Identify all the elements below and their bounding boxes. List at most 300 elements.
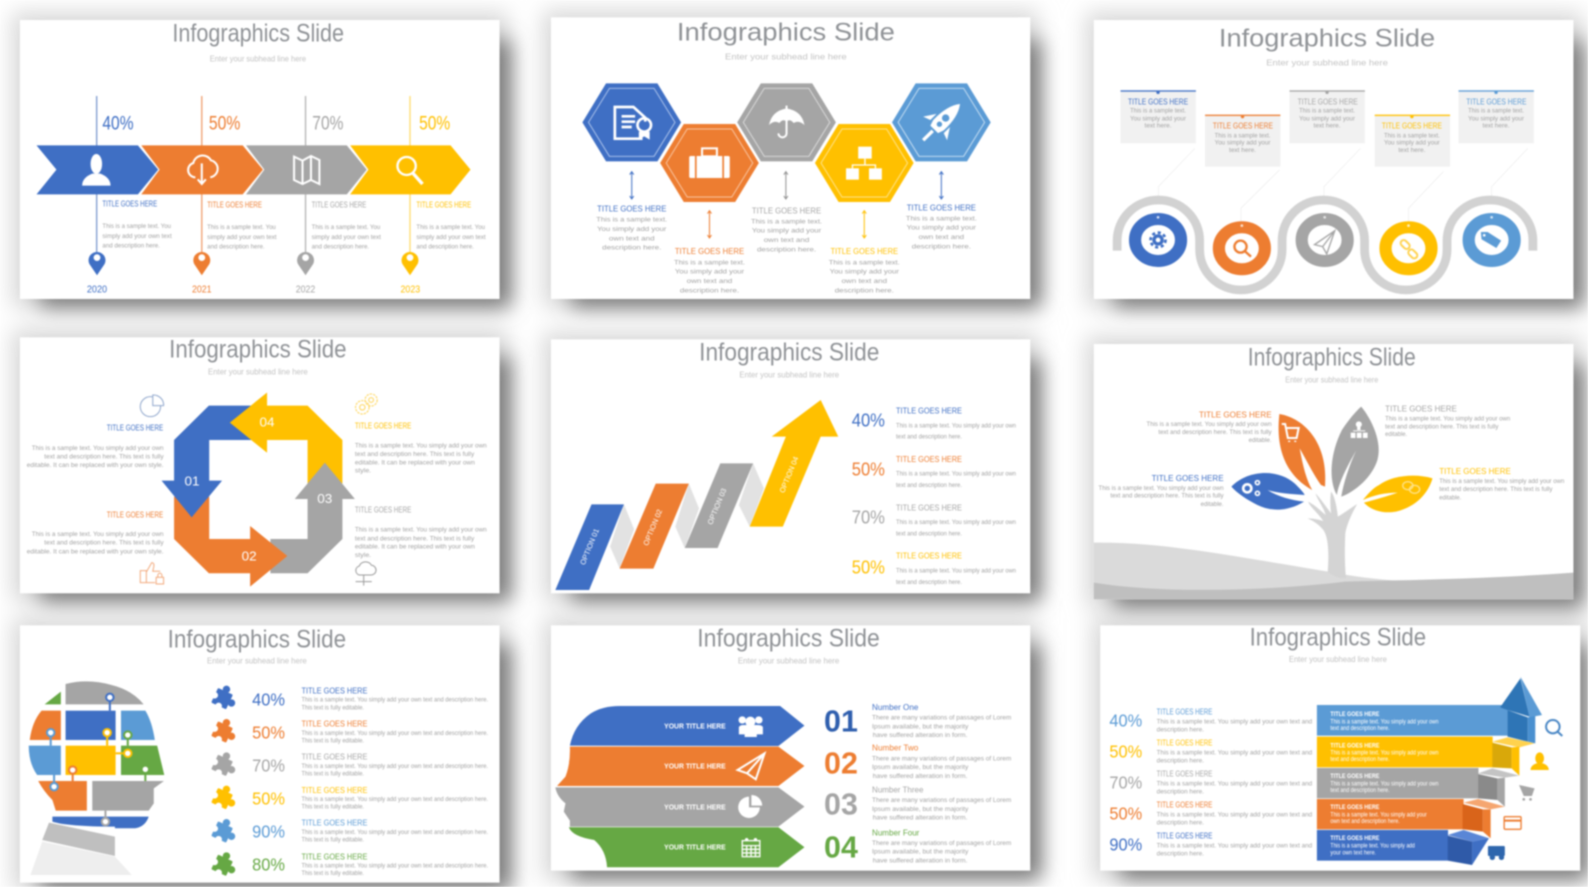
text block: yellow: This is a sample text. bbox=[829, 259, 900, 266]
card 3: You simply add your bbox=[1299, 115, 1356, 122]
card 4 bbox=[1375, 115, 1450, 167]
cycle numbers: 01 bbox=[184, 474, 199, 489]
row: 40%: This is a sample text. You simply add your own bbox=[896, 422, 1016, 429]
row: 50% yellow: text and description here. bbox=[896, 579, 962, 586]
title: Infographics Slide bbox=[169, 335, 347, 363]
text block: orange bbox=[674, 247, 745, 294]
text block: 2020: TITLE GOES HERE bbox=[102, 200, 158, 209]
row: 70% bbox=[852, 503, 1016, 537]
text block: orange bbox=[1147, 410, 1272, 444]
subhead: Enter your subhead line here bbox=[1285, 375, 1379, 384]
percentages: 50% bbox=[419, 112, 450, 134]
card 2: text here. bbox=[1229, 147, 1256, 154]
band 1 blue: YOUR TITLE HERE bbox=[664, 721, 726, 730]
text block: orange: TITLE GOES HERE bbox=[107, 510, 164, 519]
row: 50% orange: text and description here. bbox=[896, 482, 962, 489]
big numbers bbox=[824, 704, 858, 864]
text block: yellow bbox=[829, 247, 900, 294]
card 5 bbox=[1459, 90, 1534, 143]
text block: blue bbox=[1099, 474, 1224, 508]
leaf: yellow with chat bbox=[1363, 476, 1433, 512]
hexagon: orange briefcase bbox=[660, 124, 759, 202]
row: 90% light blue bbox=[207, 815, 488, 848]
row: 40% blue: 40% bbox=[252, 689, 285, 709]
years bbox=[87, 285, 420, 296]
title: Infographics Slide bbox=[699, 339, 879, 367]
title: Infographics Slide bbox=[172, 20, 344, 48]
text block: yellow: text and description here. This text is fully bbox=[1439, 486, 1553, 493]
row: 40% blue bbox=[207, 681, 488, 715]
text block: yellow: editable. It can be replaced with your own bbox=[355, 459, 475, 466]
bar labels: This is a sample text. You simply add your own bbox=[1330, 749, 1439, 756]
row: 50% orange bbox=[207, 715, 488, 748]
row: 40% bbox=[852, 407, 1016, 441]
text block: 2022: This is a sample text. You bbox=[312, 224, 380, 231]
row: 50% orange: 50% bbox=[852, 458, 885, 479]
card 5: TITLE GOES HERE bbox=[1466, 97, 1527, 106]
ring: blue gear bbox=[1135, 216, 1181, 261]
card 3: text here. bbox=[1314, 123, 1341, 130]
text block: number three: have suffered alteration in form. bbox=[873, 815, 967, 822]
slide background bbox=[551, 625, 1030, 871]
arrow head: 04 yellow bbox=[230, 393, 267, 453]
text block: yellow: You simply add your bbox=[830, 269, 900, 276]
text block: number four: Number Four bbox=[872, 828, 920, 837]
row: 50% yellow: 50% bbox=[1109, 742, 1142, 762]
text block: orange: This is a sample text. bbox=[674, 259, 745, 266]
timeline vertical lines bbox=[97, 96, 410, 253]
panel: winding path slide bbox=[1094, 20, 1573, 299]
row: 50% orange: This is a sample text. You simply add your own text and bbox=[1157, 811, 1312, 818]
row: 40% blue: This text is fully editable. bbox=[301, 704, 364, 711]
text block: gray bbox=[1385, 405, 1510, 438]
band 3 gray bbox=[555, 787, 804, 827]
row: 70% gray: This is a sample text. You simply add your own text and description here. bbox=[301, 763, 488, 770]
ribbon: option 02: OPTION 02 bbox=[641, 508, 664, 547]
icon: thumbs up outline bbox=[140, 563, 164, 584]
bar labels: This is a sample text. You simply add your own bbox=[1330, 718, 1439, 725]
band 2 orange: YOUR TITLE HERE bbox=[664, 762, 726, 771]
text block: number one bbox=[872, 703, 1012, 739]
row: 90% light blue: This text is fully editable. bbox=[301, 837, 364, 844]
slide background bbox=[1100, 625, 1580, 871]
icon: map bbox=[294, 156, 319, 184]
text block: gray: This is a sample text. You simply add your own bbox=[1385, 416, 1510, 423]
row: 50% yellow: TITLE GOES HERE bbox=[896, 552, 963, 561]
subhead: Enter your subhead line here bbox=[725, 52, 847, 61]
text block: number three: Number Three bbox=[872, 786, 924, 795]
card 1: This is a sample text. bbox=[1130, 108, 1186, 115]
text block: orange: TITLE GOES HERE bbox=[675, 247, 745, 256]
text block: blue: This is a sample text. bbox=[596, 217, 667, 224]
text block: number one: Ipsum available, but the majority bbox=[872, 723, 969, 730]
card 3: TITLE GOES HERE bbox=[1298, 97, 1358, 106]
row: 40% blue: TITLE GOES HERE bbox=[301, 686, 368, 695]
panel: cycle arrows slide bbox=[20, 335, 500, 593]
slide background bbox=[551, 17, 1030, 299]
percentages: 40% bbox=[102, 112, 134, 134]
icon: network cloud outline bbox=[356, 562, 376, 586]
bar labels: TITLE GOES HERE bbox=[1330, 773, 1380, 780]
location pins bbox=[89, 252, 418, 275]
text block: light blue: You simply add your bbox=[907, 225, 977, 232]
card 4: This is a sample text. bbox=[1384, 132, 1440, 139]
card 1: You simply add your bbox=[1130, 115, 1187, 122]
text block: 2023 bbox=[416, 201, 486, 251]
text block: gray: This is a sample text. You simply add your own bbox=[355, 527, 487, 534]
bar labels: TITLE GOES HERE bbox=[1330, 711, 1380, 718]
row: 50% yellow: 50% bbox=[852, 556, 885, 577]
slide background bbox=[20, 625, 500, 883]
row: 70% gray: 70% bbox=[252, 755, 285, 775]
row: 70%: description here. bbox=[1157, 789, 1204, 796]
row: 50% orange: description here. bbox=[1157, 820, 1204, 827]
years: 2020 bbox=[87, 285, 108, 296]
icon: credit card bbox=[1504, 817, 1521, 829]
text block: gray: TITLE GOES HERE bbox=[355, 505, 412, 514]
ribbon: option 04 arrow: OPTION 04 bbox=[777, 455, 800, 494]
text block: number four: Ipsum available, but the majority bbox=[872, 849, 969, 856]
text block: blue: text and description here. This text is fully bbox=[1110, 493, 1224, 500]
icon: person bbox=[1531, 752, 1549, 770]
orange step bbox=[1463, 799, 1505, 838]
band 1 blue bbox=[570, 706, 804, 746]
text block: 2021: simply add your own text bbox=[207, 234, 277, 241]
arrow: 02 orange bbox=[174, 497, 287, 587]
row: 70% gray: TITLE GOES HERE bbox=[301, 753, 368, 762]
row: 80% green: This text is fully editable. bbox=[301, 870, 364, 877]
row: 50% yellow bbox=[207, 781, 488, 815]
card 1: text here. bbox=[1145, 123, 1172, 130]
subhead: Enter your subhead line here bbox=[1289, 655, 1387, 664]
row: 50% orange bbox=[852, 455, 1016, 489]
leaf: blue with gears bbox=[1231, 473, 1305, 510]
text block: yellow: text and description here. This text is fully bbox=[355, 451, 475, 458]
text block: 2022: simply add your own text bbox=[312, 234, 381, 241]
text block: 2021: and description here. bbox=[207, 244, 265, 251]
yellow step bbox=[1492, 737, 1535, 776]
text block: gray: TITLE GOES HERE bbox=[752, 206, 822, 215]
text block: number four: There are many variations of passages of Lorem bbox=[872, 840, 1012, 847]
text block: gray: editable. It can be replaced with your own bbox=[355, 544, 475, 551]
blue step bbox=[1448, 830, 1489, 865]
percentages: 50% bbox=[209, 112, 240, 134]
subhead: Enter your subhead line here bbox=[1266, 59, 1388, 68]
text block: blue: You simply add your bbox=[597, 226, 667, 233]
text block: blue: TITLE GOES HERE bbox=[107, 424, 164, 433]
slide background bbox=[1094, 344, 1573, 599]
text block: 2023: TITLE GOES HERE bbox=[416, 201, 472, 210]
text block: 2023: simply add your own text bbox=[416, 234, 486, 241]
text block: yellow: This is a sample text. You simply add your own bbox=[355, 442, 487, 449]
card 2: TITLE GOES HERE bbox=[1213, 122, 1273, 131]
big numbers: 04 bbox=[824, 830, 858, 864]
title: Infographics Slide bbox=[168, 625, 346, 653]
ribbon: option 01: OPTION 01 bbox=[578, 527, 601, 566]
row: 50% yellow: description here. bbox=[1157, 758, 1204, 765]
cycle numbers: 03 bbox=[317, 491, 332, 506]
row: 50% yellow: TITLE GOES HERE bbox=[301, 786, 368, 795]
icon: pie outline bbox=[140, 395, 164, 417]
title: Infographics Slide bbox=[697, 625, 880, 653]
text block: number one: have suffered alteration in form. bbox=[873, 732, 967, 739]
text block: orange: text and description here. This text is fully bbox=[1158, 429, 1272, 436]
row: 90%: This is a sample text. You simply add your own text and bbox=[1157, 842, 1312, 849]
text block: orange: description here. bbox=[680, 287, 739, 294]
row: 70%: This is a sample text. You simply add your own text and bbox=[1157, 780, 1312, 787]
gray step bbox=[1478, 768, 1519, 807]
bar labels: TITLE GOES HERE bbox=[1330, 835, 1380, 842]
text block: blue: This is a sample text. You simply add your own bbox=[32, 445, 164, 452]
text block: gray: TITLE GOES HERE bbox=[1385, 405, 1457, 414]
bar labels: TITLE GOES HERE bbox=[1330, 742, 1380, 749]
row: 70% gray bbox=[207, 748, 488, 782]
row: 90%: description here. bbox=[1157, 851, 1204, 858]
row: 40%: TITLE GOES HERE bbox=[1157, 707, 1213, 716]
row: 80% green bbox=[207, 848, 488, 881]
winding road bbox=[1117, 200, 1533, 290]
text block: gray: editable. bbox=[1385, 431, 1407, 438]
band 4 green: YOUR TITLE HERE bbox=[664, 843, 726, 852]
up arrow 3D bbox=[1500, 677, 1542, 743]
text block: number three: There are many variations of passages of Lorem bbox=[872, 797, 1012, 804]
text block: number four bbox=[872, 828, 1012, 864]
subhead: Enter your subhead line here bbox=[739, 370, 840, 379]
bar labels: text and description here. bbox=[1330, 787, 1390, 794]
text block: blue: editable. It can be replaced with your own style. bbox=[27, 462, 164, 469]
hexagon: light blue rocket bbox=[892, 83, 991, 161]
leaf: orange with cart bbox=[1279, 414, 1325, 490]
years: 2022 bbox=[296, 285, 316, 296]
icon: person bbox=[82, 154, 111, 186]
subhead: Enter your subhead line here bbox=[738, 657, 840, 666]
cycle numbers: 02 bbox=[242, 549, 257, 564]
bar 4 orange bbox=[1317, 799, 1464, 829]
row: 50% yellow: This is a sample text. You simply add your own text and description here. bbox=[301, 796, 488, 803]
text block: 2020: This is a sample text. You bbox=[102, 223, 171, 230]
text block: orange: This is a sample text. You simply add your own bbox=[1147, 421, 1272, 428]
text block: gray: This is a sample text. bbox=[751, 218, 822, 225]
icon: truck bbox=[1488, 846, 1505, 860]
panel: hexagons slide bbox=[551, 17, 1030, 299]
text block: light blue: This is a sample text. bbox=[906, 215, 977, 222]
text block: gray: You simply add your bbox=[752, 228, 822, 235]
row: 80% green: 80% bbox=[252, 854, 285, 874]
text block: number three bbox=[872, 786, 1012, 822]
arrow: 04 yellow body bbox=[230, 393, 342, 483]
text block: 2020: simply add your own text bbox=[102, 233, 172, 240]
card 2: You simply add your bbox=[1215, 140, 1271, 147]
text block: yellow: TITLE GOES HERE bbox=[830, 247, 899, 256]
bar labels: This is a sample text. You simply add bbox=[1330, 842, 1415, 849]
row: 50% orange: TITLE GOES HERE bbox=[1157, 800, 1213, 809]
text block: 2023: This is a sample text. You bbox=[416, 224, 485, 231]
row: 50% yellow: 50% bbox=[252, 789, 285, 809]
text block: orange: TITLE GOES HERE bbox=[1199, 410, 1272, 419]
row: 40% bbox=[1109, 707, 1312, 734]
panel: stair arrow slide bbox=[1100, 624, 1580, 871]
title: Infographics Slide bbox=[1219, 25, 1435, 53]
bar labels: This is a sample text. You simply add your bbox=[1330, 811, 1427, 818]
bar 5 blue bbox=[1317, 830, 1448, 861]
card 1 bbox=[1121, 90, 1196, 143]
ribbon: option 04 arrow bbox=[750, 400, 838, 527]
text block: orange bbox=[27, 510, 164, 555]
bar labels: TITLE GOES HERE bbox=[1330, 804, 1380, 811]
card 1: TITLE GOES HERE bbox=[1128, 97, 1189, 106]
row: 50% orange: TITLE GOES HERE bbox=[896, 455, 963, 464]
bar labels: text and description here. bbox=[1330, 725, 1390, 732]
text block: light blue: description here. bbox=[912, 243, 971, 250]
row: 50% orange: 50% bbox=[252, 722, 285, 742]
text block: 2020: and description here. bbox=[102, 243, 160, 250]
text block: 2021: This is a sample text. You bbox=[207, 224, 276, 231]
text block: 2020 bbox=[102, 200, 172, 250]
card 4: TITLE GOES HERE bbox=[1382, 122, 1442, 131]
text block: blue: own text and bbox=[609, 235, 655, 242]
hexagon: blue document bbox=[582, 83, 681, 161]
row: 50% orange: 50% bbox=[1109, 804, 1142, 824]
text block: gray: text and description here. This text is fully bbox=[1385, 423, 1499, 430]
row: 90% light blue: TITLE GOES HERE bbox=[301, 819, 368, 828]
band 2 orange bbox=[557, 747, 804, 786]
percentages: 70% bbox=[312, 112, 343, 134]
row: 80% green: TITLE GOES HERE bbox=[301, 852, 368, 861]
text block: yellow: description here. bbox=[835, 287, 894, 294]
tree trunk bbox=[1307, 492, 1357, 578]
text block: gray bbox=[751, 206, 822, 253]
ring: light blue tag bbox=[1469, 216, 1515, 261]
slide background bbox=[20, 337, 500, 593]
card 3 bbox=[1290, 90, 1365, 143]
text block: 2022: TITLE GOES HERE bbox=[312, 201, 367, 210]
slide background bbox=[20, 20, 500, 299]
text block: 2023: and description here. bbox=[416, 244, 474, 251]
text block: orange: This is a sample text. You simply add your own bbox=[32, 531, 164, 538]
row: 80% green: This is a sample text. You simply add your own text and description here. bbox=[301, 863, 488, 870]
bar 2 yellow bbox=[1317, 737, 1493, 767]
big numbers: 01 bbox=[824, 704, 858, 739]
text block: number two: There are many variations of passages of Lorem bbox=[872, 755, 1012, 762]
icon: magnifier bbox=[397, 157, 422, 184]
ribbon: option 03: OPTION 03 bbox=[705, 487, 728, 526]
slide background bbox=[1094, 20, 1573, 299]
text block: number one: There are many variations of passages of Lorem bbox=[872, 714, 1012, 721]
band 3 gray: YOUR TITLE HERE bbox=[664, 802, 726, 811]
text block: blue: TITLE GOES HERE bbox=[1152, 474, 1224, 483]
bar labels: your own text here. bbox=[1330, 850, 1376, 857]
text block: number two bbox=[872, 744, 1012, 780]
card 5: text here. bbox=[1483, 123, 1510, 130]
text block: yellow: style. bbox=[355, 468, 371, 475]
text block: yellow: editable. bbox=[1439, 494, 1461, 501]
card 5: This is a sample text. bbox=[1468, 108, 1524, 115]
panel: tree slide bbox=[1094, 344, 1573, 599]
text block: blue: text and description here. This text is fully bbox=[44, 454, 164, 461]
text block: yellow bbox=[1439, 467, 1565, 501]
subhead: Enter your subhead line here bbox=[208, 367, 308, 376]
ribbon folds bbox=[610, 463, 764, 568]
row: 40%: 40% bbox=[852, 410, 885, 431]
card 5: You simply add your bbox=[1468, 115, 1525, 122]
bar labels: This is a sample text. You simply add your own bbox=[1330, 780, 1439, 787]
row: 50% orange: TITLE GOES HERE bbox=[301, 720, 368, 729]
row: 70%: 70% bbox=[1109, 773, 1142, 793]
text block: number two: Ipsum available, but the majority bbox=[872, 764, 969, 771]
text block: yellow: This is a sample text. You simply add your own bbox=[1439, 478, 1565, 485]
subhead: Enter your subhead line here bbox=[210, 55, 307, 64]
row: 70%: This is a sample text. You simply add your own bbox=[896, 519, 1016, 526]
ribbon: option 01 bbox=[555, 504, 624, 590]
icon: magnifier bbox=[1546, 720, 1562, 736]
big numbers: 02 bbox=[824, 746, 858, 780]
title: Infographics Slide bbox=[1248, 344, 1416, 372]
text block: gray: text and description here. This text is fully bbox=[355, 535, 475, 542]
ring: yellow link bbox=[1386, 224, 1431, 269]
panel: rising arrow slide bbox=[551, 339, 1030, 593]
row: 70% bbox=[1109, 769, 1312, 796]
arrow: 03 gray bbox=[270, 463, 355, 573]
band 4 green bbox=[569, 827, 804, 867]
text block: blue: TITLE GOES HERE bbox=[597, 205, 667, 214]
subhead: Enter your subhead line here bbox=[207, 657, 307, 666]
text block: orange: text and description here. This text is fully bbox=[44, 540, 164, 547]
row: 40%: 40% bbox=[1109, 711, 1142, 731]
text block: orange: editable. bbox=[1249, 437, 1272, 444]
row: 50% yellow: TITLE GOES HERE bbox=[1157, 738, 1213, 747]
title: Infographics Slide bbox=[1250, 624, 1426, 652]
row: 50% yellow: This is a sample text. You simply add your own bbox=[896, 568, 1016, 575]
row: 90% light blue: This is a sample text. You simply add your own text and description here. bbox=[301, 829, 488, 836]
text block: orange: own text and bbox=[687, 278, 733, 285]
bar labels: text and description here. bbox=[1330, 756, 1390, 763]
bar 3 gray bbox=[1317, 768, 1478, 798]
text block: yellow: TITLE GOES HERE bbox=[355, 421, 412, 430]
text block: light blue: own text and bbox=[919, 234, 964, 241]
row: 70%: 70% bbox=[852, 507, 885, 528]
row: 40%: TITLE GOES HERE bbox=[896, 407, 963, 416]
bar labels bbox=[1330, 711, 1439, 857]
text block: number two: Number Two bbox=[872, 744, 919, 753]
puzzle head bbox=[29, 681, 164, 875]
text block: blue: description here. bbox=[602, 245, 661, 252]
row: 70%: text and description here. bbox=[896, 530, 962, 537]
panel: timeline arrows slide bbox=[20, 20, 500, 299]
row: 40% blue: This is a sample text. You simply add your own text and description here. bbox=[301, 697, 488, 704]
cycle numbers bbox=[184, 415, 332, 564]
bar 1 light blue bbox=[1317, 705, 1508, 736]
text block: light blue bbox=[906, 204, 977, 250]
text block: orange: You simply add your bbox=[675, 269, 745, 276]
leaf: gray with org chart bbox=[1332, 407, 1379, 497]
text block: number two: have suffered alteration in form. bbox=[873, 773, 967, 780]
row: 50% orange: This text is fully editable. bbox=[301, 738, 364, 745]
ring: gray paper plane bbox=[1302, 216, 1348, 261]
row: 50% yellow: This is a sample text. You simply add your own text and bbox=[1157, 749, 1312, 756]
text block: blue: This is a sample text. You simply add your own bbox=[1099, 485, 1224, 492]
row: 50% yellow bbox=[1109, 738, 1312, 765]
row: 90% light blue: 90% bbox=[252, 821, 285, 841]
row: 90%: TITLE GOES HERE bbox=[1157, 831, 1213, 840]
ground: back hill bbox=[1094, 543, 1430, 599]
text block: 2021: TITLE GOES HERE bbox=[207, 201, 262, 210]
bar labels: own text and description here. bbox=[1330, 818, 1400, 825]
ribbon: option 03 bbox=[685, 463, 753, 548]
card 2: This is a sample text. bbox=[1215, 132, 1271, 139]
row: 50% orange bbox=[1109, 800, 1312, 827]
text block: yellow bbox=[355, 421, 487, 475]
text block: yellow: TITLE GOES HERE bbox=[1439, 467, 1512, 476]
